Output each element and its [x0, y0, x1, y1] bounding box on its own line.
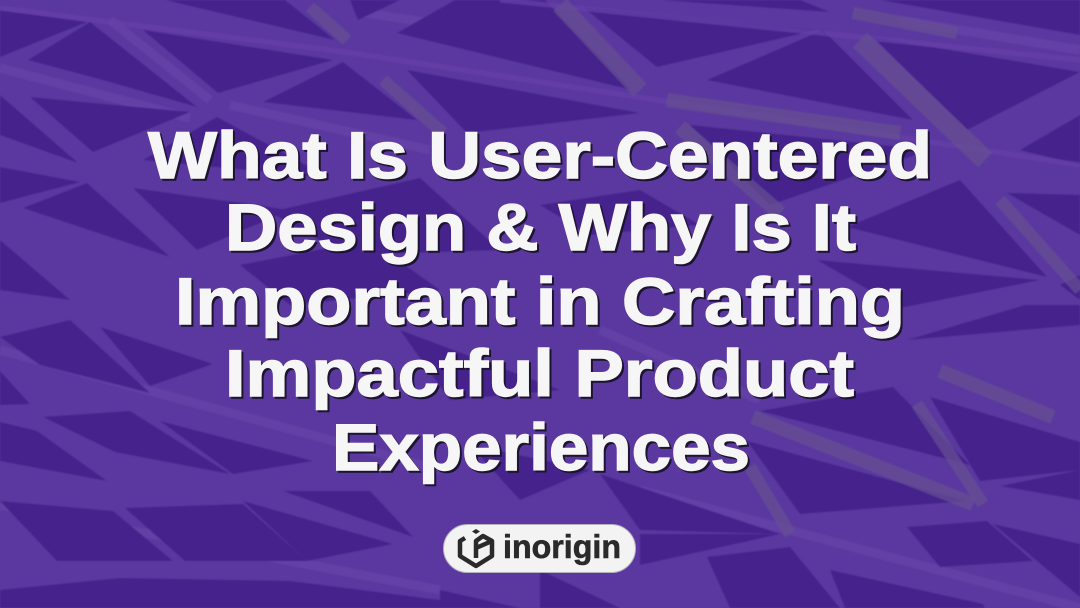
logo badge	[444, 524, 636, 572]
title	[148, 118, 932, 484]
icon: hexagonal cube	[460, 529, 492, 566]
title: Important in Crafting	[175, 264, 905, 338]
badge pill	[444, 524, 636, 572]
wordmark: inorigin	[503, 528, 621, 565]
title: What Is User-Centered	[148, 118, 932, 192]
title: Design & Why Is It	[225, 190, 856, 264]
title: Impactful Product	[225, 336, 854, 410]
title: Experiences	[332, 410, 750, 484]
